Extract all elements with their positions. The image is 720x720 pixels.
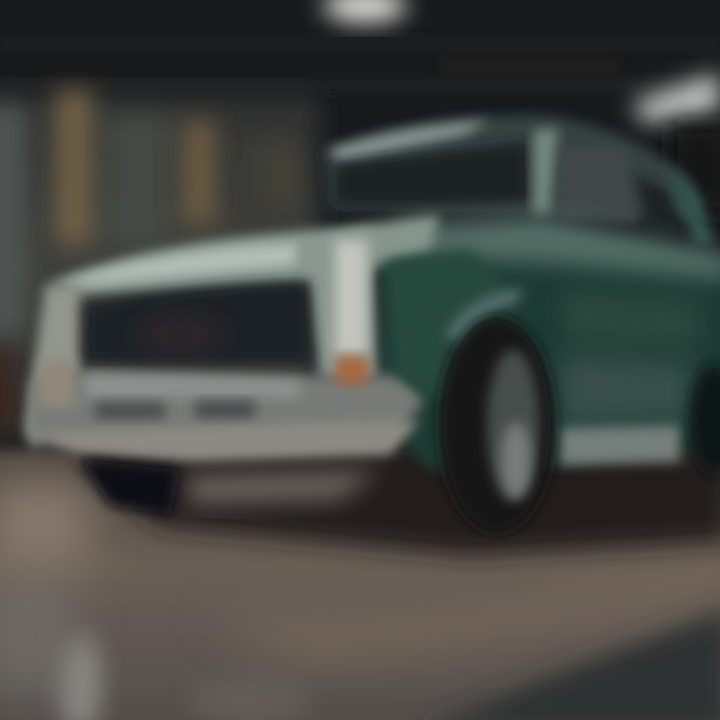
fender arch xyxy=(385,250,510,400)
truck xyxy=(25,115,720,533)
truck shadow on floor xyxy=(85,440,720,555)
hood xyxy=(48,215,440,295)
front corner pillar xyxy=(300,228,378,380)
windshield xyxy=(335,142,530,205)
wheel hub xyxy=(501,422,531,498)
hood highlight xyxy=(60,243,300,284)
roof highlight xyxy=(328,120,490,162)
side window xyxy=(558,145,640,222)
door upper reflection xyxy=(400,215,720,280)
wheel tire xyxy=(439,317,555,533)
bumper upper shine xyxy=(85,374,300,398)
rear side window xyxy=(635,175,688,240)
grille tint xyxy=(135,315,225,355)
skid plate xyxy=(185,470,380,505)
under-bumper shadow xyxy=(80,460,180,515)
truck cab roof xyxy=(325,115,700,220)
front corner shine xyxy=(335,240,367,355)
left side grille surround xyxy=(25,285,80,450)
bumper lower lip xyxy=(30,420,420,462)
bumper xyxy=(30,370,425,450)
wheel rim xyxy=(487,349,539,501)
floor xyxy=(0,450,720,720)
left headlight xyxy=(40,360,74,408)
lower door panel xyxy=(560,355,690,425)
windshield pillar xyxy=(533,128,558,215)
orange signal light xyxy=(336,356,368,384)
grille xyxy=(85,280,312,362)
ceiling light: top xyxy=(323,0,407,23)
rear pillar xyxy=(665,165,715,245)
background: tan wall pillars xyxy=(55,90,292,245)
bumper dark slots xyxy=(95,400,255,420)
background: right wall xyxy=(670,125,720,215)
wheel xyxy=(439,317,555,533)
rear wheel xyxy=(690,365,720,475)
truck door body xyxy=(380,235,720,470)
ceiling light: right xyxy=(632,72,720,124)
door panel shine xyxy=(560,290,700,350)
background: left wall xyxy=(0,95,320,440)
rocker panel xyxy=(560,425,680,465)
fender shine xyxy=(445,288,525,345)
